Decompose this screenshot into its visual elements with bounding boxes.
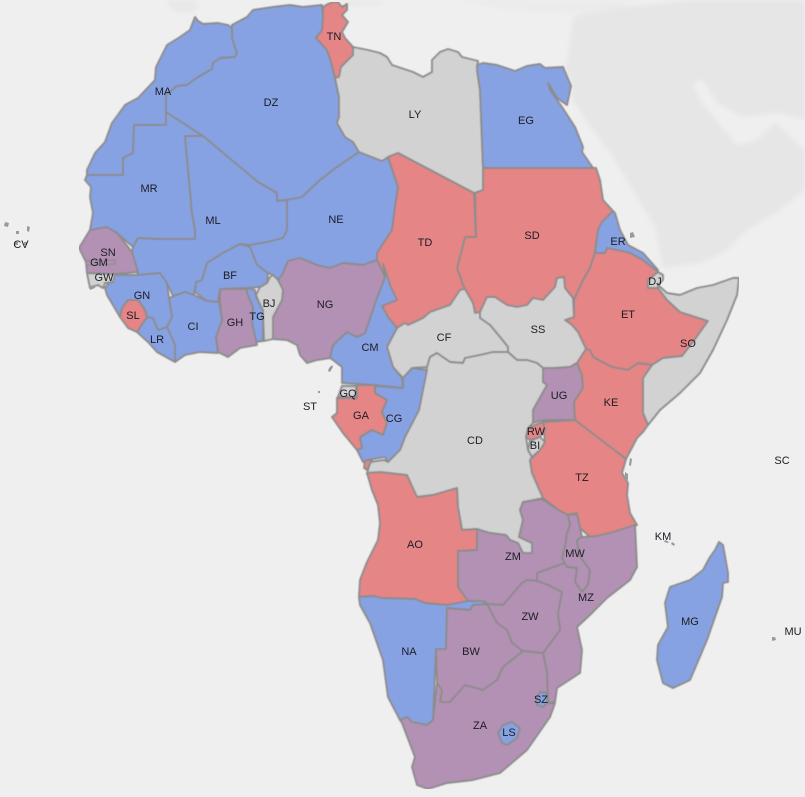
label: ZM: ZM (505, 551, 521, 563)
label: ST: ST (303, 401, 317, 413)
country: Gabon (332, 385, 387, 450)
label: BI: BI (530, 440, 540, 452)
label: SC: SC (774, 455, 790, 467)
country: Gambia (86, 260, 115, 265)
label: LR: LR (150, 334, 164, 346)
label: CG: CG (386, 413, 402, 425)
country: Burundi (528, 437, 545, 457)
label: GN: GN (134, 290, 150, 302)
country: Rwanda (526, 422, 545, 440)
country: Mauritania (85, 112, 203, 247)
country: Somalia (643, 278, 739, 425)
country: Republic of the Congo (357, 368, 427, 462)
label: RW: RW (527, 426, 546, 438)
label: GQ: GQ (339, 388, 357, 400)
country: Guinea (105, 273, 172, 330)
label: ZW: ZW (521, 611, 539, 623)
label: BF: BF (223, 270, 237, 282)
label: CM: CM (361, 342, 379, 354)
label: TD: TD (418, 237, 432, 249)
label: ML: ML (205, 215, 221, 227)
country: Central African Republic (387, 289, 508, 378)
label: GW: GW (95, 272, 114, 284)
label: NG: NG (317, 299, 333, 311)
country: Tanzania (530, 420, 637, 537)
country: Sierra Leone (120, 300, 147, 332)
label: EG: EG (518, 115, 534, 127)
country: Chad (377, 153, 476, 328)
country: Algeria (166, 5, 359, 201)
neighbouring land: Middle East and Europe (167, 0, 805, 268)
country: Angola (359, 472, 477, 605)
label: NE: NE (328, 214, 344, 226)
label: MR: MR (140, 183, 158, 195)
country: Ethiopia (565, 248, 708, 370)
label: CD: CD (467, 435, 483, 447)
country: Cameroon (330, 264, 403, 388)
country: Lesotho (498, 722, 520, 745)
country: Equatorial Guinea (338, 386, 356, 397)
label: DJ: DJ (648, 276, 662, 288)
label: MA: MA (155, 86, 172, 98)
label: SZ: SZ (534, 694, 548, 706)
label: TN: TN (327, 31, 341, 43)
country: Sudan (457, 168, 613, 313)
label: LY: LY (409, 109, 422, 121)
label: SD: SD (524, 230, 540, 242)
country: Morocco and Western Sahara (87, 17, 237, 175)
label: TG: TG (249, 311, 265, 323)
label: NA: NA (401, 646, 417, 658)
label: BJ: BJ (263, 298, 275, 310)
label: ZA: ZA (473, 720, 488, 732)
country: Côte d'Ivoire (167, 292, 222, 362)
country: Kenya (574, 349, 652, 459)
label: BW: BW (462, 646, 480, 658)
country: Eritrea (595, 211, 658, 273)
label: CF: CF (437, 332, 452, 344)
country: Tunisia (316, 2, 353, 78)
country: Malawi (562, 514, 590, 592)
country: Zambia (458, 499, 570, 605)
country: Niger (248, 152, 398, 280)
label: GM: GM (90, 257, 108, 269)
label: UG: UG (551, 390, 567, 402)
small islands (4, 222, 776, 641)
country: Mali (132, 136, 287, 296)
country: South Sudan (480, 277, 586, 368)
country: Djibouti (648, 272, 663, 288)
label: SO: SO (680, 338, 696, 350)
label: TZ: TZ (575, 472, 589, 484)
country: Angola, Cabinda (364, 460, 372, 470)
label: MZ: MZ (578, 592, 594, 604)
country: Guinea-Bissau (87, 273, 115, 288)
label: GH: GH (227, 317, 243, 329)
label: KE: KE (604, 397, 618, 409)
label: KM: KM (655, 531, 671, 543)
country: Egypt (477, 63, 593, 168)
country: Madagascar (657, 542, 728, 688)
label: LS: LS (502, 727, 516, 739)
label: SN: SN (100, 247, 116, 259)
country: Benin (256, 275, 283, 341)
label: ER: ER (610, 236, 626, 248)
country: Democratic Republic of the Congo (367, 352, 547, 553)
label: DZ: DZ (264, 97, 279, 109)
country: Mozambique (537, 525, 637, 703)
label: MG: MG (681, 616, 699, 628)
country: Botswana (436, 604, 523, 702)
country: Libya (335, 47, 483, 193)
country: Namibia (359, 596, 487, 725)
label: SL: SL (126, 310, 140, 322)
country: Senegal (79, 227, 138, 274)
country: Burkina Faso (195, 244, 268, 302)
label: CI: CI (188, 321, 198, 333)
country: Eswatini (537, 692, 547, 707)
country: Ghana (216, 289, 257, 357)
country: Togo (247, 288, 263, 342)
label: MW: MW (565, 548, 585, 560)
country: Uganda (533, 363, 583, 423)
label: MU: MU (784, 626, 802, 638)
country: South Africa (400, 651, 555, 789)
label: ET: ET (621, 309, 635, 321)
label: GA: GA (353, 410, 370, 422)
country: Nigeria (273, 258, 385, 363)
country: Zimbabwe (487, 580, 562, 653)
country: Liberia (137, 317, 175, 362)
label: AO: AO (407, 539, 423, 551)
label: CV: CV (13, 239, 29, 251)
label: SS: SS (531, 324, 545, 336)
